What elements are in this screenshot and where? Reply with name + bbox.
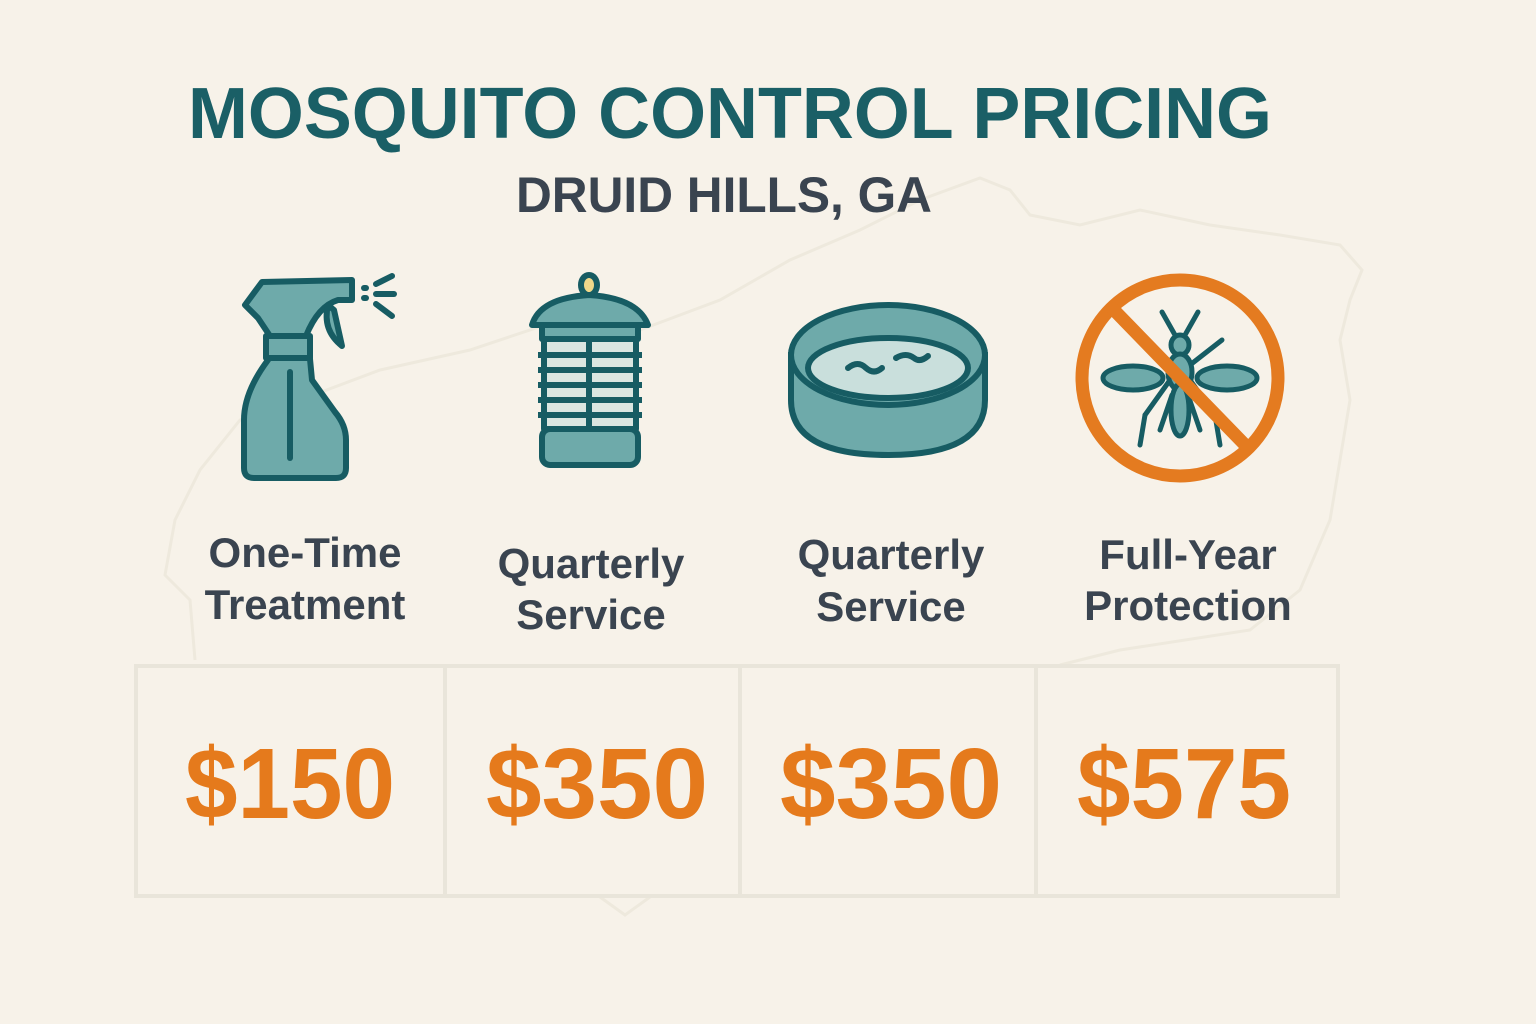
icon: spray bottle: [244, 276, 394, 478]
price: $575: $575: [1077, 728, 1291, 840]
title: MOSQUITO CONTROL PRICING: [188, 74, 1272, 154]
icon: water dish: [791, 305, 985, 455]
label: full-year protection: [1084, 531, 1292, 629]
price: $150: $150: [185, 728, 395, 840]
label: full-year protection: Protection: [1084, 582, 1292, 629]
label: full-year protection: Full-Year: [1099, 531, 1277, 578]
subtitle: DRUID HILLS, GA: [516, 167, 932, 223]
label: quarterly service 2: [798, 531, 985, 630]
label: quarterly service 1: Service: [516, 591, 666, 638]
icon: no mosquito: [1082, 280, 1278, 476]
label: quarterly service 1: Quarterly: [498, 540, 685, 587]
label: quarterly service 2: Service: [816, 583, 966, 630]
label: one-time treatment: One-Time: [209, 529, 401, 576]
price: $350 second: $350: [780, 728, 1002, 840]
price table: [136, 666, 1338, 896]
label: one-time treatment: [205, 529, 405, 628]
label: one-time treatment: Treatment: [205, 581, 405, 628]
label: quarterly service 2: Quarterly: [798, 531, 985, 578]
price: $350: $350: [486, 728, 708, 840]
label: quarterly service 1: [498, 540, 685, 638]
icon: bug zapper lamp: [532, 275, 648, 465]
